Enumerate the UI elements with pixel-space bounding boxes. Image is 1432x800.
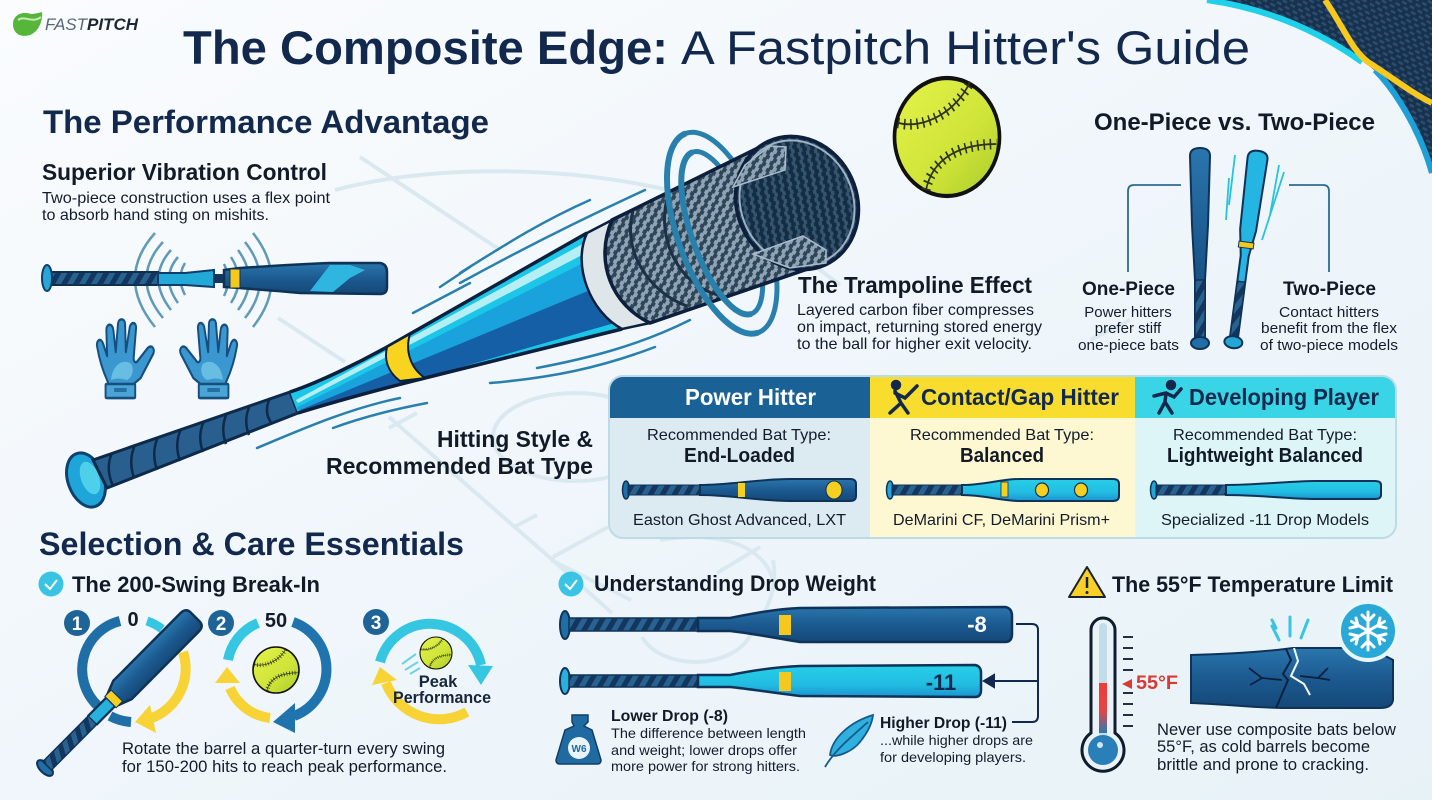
- step 3: Peak: [419, 673, 458, 691]
- icon: snowflake: [1339, 602, 1397, 660]
- text block: The Trampoline Effect: to the ball for higher exit velocity.: [797, 336, 1032, 353]
- heading: The Performance Advantage: The Performance Advantage: [43, 104, 489, 140]
- column: contact/gap hitter: DeMarini CF, DeMarini Prism+: [893, 512, 1110, 529]
- heading: One-Piece vs. Two-Piece: [1094, 109, 1375, 136]
- icon: check: [558, 572, 584, 596]
- text block: The Trampoline Effect: The Trampoline Effect: [798, 272, 1032, 298]
- one-piece text: prefer stiff: [1095, 320, 1162, 337]
- step 3: [363, 609, 493, 719]
- step 3: 3: [371, 613, 381, 634]
- description: 55°F, as cold barrels become: [1157, 738, 1370, 756]
- text block: Superior Vibration Control: Two-piece construction uses a flex point: [42, 190, 331, 207]
- bracket arrow: [984, 624, 1038, 722]
- icon: feather: [825, 715, 873, 767]
- description: Never use composite bats below: [1157, 721, 1396, 739]
- column: developing player: [1150, 382, 1381, 529]
- heading: Hitting Style & Recommended Bat Type: Recommended Bat Type: [326, 453, 593, 479]
- higher drop text: Higher Drop (-11): [880, 715, 1007, 732]
- column: contact/gap hitter: Contact/Gap Hitter: [921, 384, 1119, 410]
- higher drop text: for developing players.: [880, 749, 1026, 765]
- column: power hitter: [622, 384, 856, 529]
- icon: weight: W6: [572, 744, 587, 755]
- column: developing player: Developing Player: [1189, 384, 1379, 410]
- knob: [60, 448, 112, 512]
- column: contact/gap hitter: [886, 382, 1119, 529]
- column: developing player: Lightweight Balanced: [1167, 445, 1363, 467]
- column: contact/gap hitter: Recommended Bat Type:: [910, 427, 1094, 444]
- tapered blue body: [290, 233, 622, 413]
- lower drop text: more power for strong hitters.: [611, 758, 800, 774]
- two-piece text: Contact hitters: [1279, 304, 1379, 321]
- icon: check: [38, 572, 64, 596]
- barrel opening: [714, 116, 880, 290]
- step 2: 50: [265, 610, 287, 632]
- flex lines: [1226, 155, 1284, 240]
- thermometer: [1082, 618, 1133, 771]
- step 1: 1: [72, 614, 83, 635]
- description: for 150-200 hits to reach peak performance.: [122, 757, 447, 776]
- panel: hitting style table: [609, 376, 1396, 538]
- column: developing player: Recommended Bat Type:: [1173, 427, 1357, 444]
- subheading: The 200-Swing Break-In: [72, 572, 320, 597]
- description: [1157, 721, 1396, 774]
- bat: -8: -8: [967, 612, 987, 637]
- lower drop text: [611, 708, 806, 774]
- description: Rotate the barrel a quarter-turn every swing: [122, 739, 445, 758]
- step 2: 2: [216, 614, 226, 635]
- column: developing player: Specialized -11 Drop Models: [1161, 512, 1369, 529]
- column: power hitter: Easton Ghost Advanced, LXT: [633, 512, 846, 529]
- subheading: Understanding Drop Weight: [594, 571, 877, 596]
- icon: batter: [890, 382, 917, 413]
- one-piece text: [1078, 279, 1179, 354]
- panel: understanding drop weight: [556, 571, 1038, 774]
- step 3: Performance: [393, 689, 491, 707]
- cracked bat: [1191, 617, 1393, 708]
- icon: warning: [1069, 567, 1105, 597]
- back of impact rings: [644, 118, 800, 348]
- icon: gloves: [97, 319, 237, 398]
- silver ring: [582, 220, 650, 329]
- one-piece text: One-Piece: [1082, 279, 1175, 300]
- panel: 55°F temperature limit: [1069, 567, 1397, 774]
- title: The Composite Edge:: [183, 21, 668, 74]
- text block: The Trampoline Effect: on impact, returning stored energy: [797, 319, 1042, 336]
- hero bat with carbon barrel: [60, 116, 880, 512]
- two-piece text: benefit from the flex: [1261, 320, 1398, 337]
- lower drop text: The difference between length: [611, 725, 806, 741]
- one-piece bat: [1190, 148, 1210, 349]
- grip: [93, 392, 298, 488]
- one-piece text: one-piece bats: [1078, 337, 1179, 354]
- mini bat: [886, 479, 1119, 501]
- subheading: The 55°F Temperature Limit: [1112, 572, 1394, 597]
- higher drop text: [880, 715, 1033, 765]
- two-piece bat: [1223, 150, 1268, 349]
- lower drop text: Lower Drop (-8): [611, 708, 728, 725]
- column: contact/gap hitter: Balanced: [960, 445, 1044, 467]
- two-piece text: of two-piece models: [1260, 337, 1398, 354]
- text block: Superior Vibration Control: to absorb hand sting on mishits.: [42, 207, 269, 224]
- text block: The Trampoline Effect: [797, 272, 1042, 353]
- carbon barrel: [605, 142, 828, 323]
- lower drop text: and weight; lower drops offer: [611, 742, 797, 758]
- icon: weight: [556, 715, 601, 764]
- column: power hitter: Recommended Bat Type:: [647, 427, 831, 444]
- heading: Selection & Care Essentials: Selection & Care Essentials: [39, 526, 464, 562]
- step 1 bat: [32, 608, 204, 781]
- softball: [894, 78, 1000, 196]
- two-piece text: Two-Piece: [1283, 279, 1376, 300]
- step 1: 0: [127, 609, 139, 631]
- front of impact rings: [644, 133, 758, 348]
- text block: Superior Vibration Control: [42, 159, 331, 224]
- panel: the 200-swing break-in: [32, 572, 493, 781]
- description: brittle and prone to cracking.: [1157, 756, 1369, 774]
- two-piece text: [1260, 279, 1398, 354]
- heading: Hitting Style & Recommended Bat Type: [326, 426, 593, 479]
- one-piece text: Power hitters: [1084, 304, 1172, 321]
- icon: runner: [1154, 382, 1181, 413]
- text block: The Trampoline Effect: Layered carbon fiber compresses: [797, 302, 1034, 319]
- motion lines: [257, 190, 690, 448]
- logo: FAST: [45, 16, 89, 34]
- logo: [13, 12, 139, 36]
- bat: -8: [560, 607, 1012, 642]
- step 2: [208, 610, 326, 733]
- bat: -11: [560, 665, 981, 697]
- carbon fiber corner: [1207, 0, 1432, 173]
- brackets: [1128, 185, 1329, 272]
- yellow band: [386, 334, 425, 381]
- higher drop text: ...while higher drops are: [880, 732, 1033, 748]
- description: [122, 739, 447, 776]
- column: power hitter: Power Hitter: [685, 384, 816, 410]
- column: power hitter: End-Loaded: [684, 445, 795, 467]
- bat: -11: -11: [926, 670, 956, 695]
- heading: Hitting Style & Recommended Bat Type: Hitting Style &: [437, 426, 593, 452]
- text block: Superior Vibration Control: Superior Vibration Control: [42, 159, 327, 185]
- title: A Fastpitch Hitter's Guide: [681, 21, 1250, 74]
- mini bat: [622, 479, 856, 501]
- panel: one-piece vs two-piece: [1078, 109, 1398, 354]
- title: [183, 21, 1250, 74]
- two-piece bat with vibration waves: [42, 233, 387, 327]
- mini bat: [1150, 481, 1381, 499]
- logo: PITCH: [87, 16, 139, 34]
- step 1: [64, 609, 186, 733]
- 55°F marker: 55°F: [1136, 673, 1178, 694]
